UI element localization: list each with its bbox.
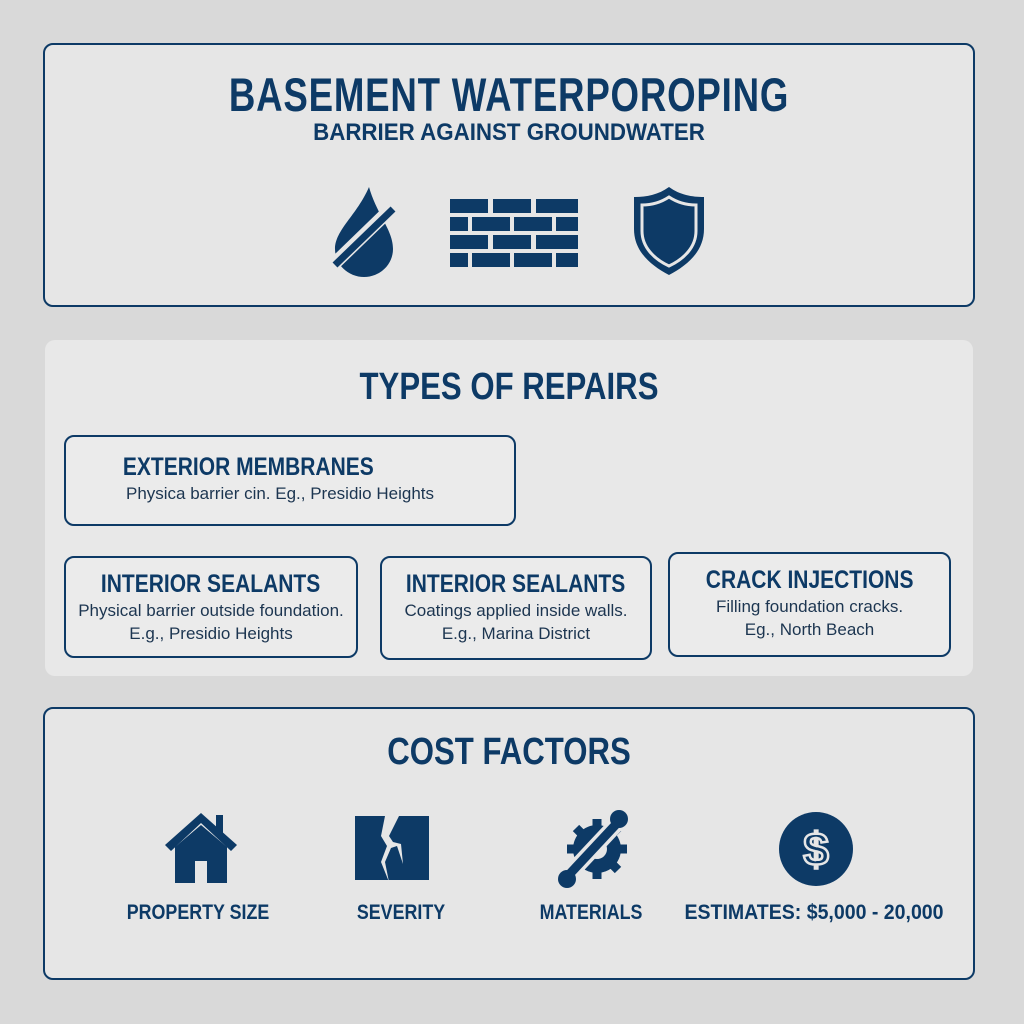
box: interior sealants 1 [64,556,358,658]
icon: house [165,813,237,883]
icon: crossed drop [332,187,396,277]
box: interior sealants 1: E.g., Presidio Heights [129,624,293,643]
box: interior sealants 2: Coatings applied inside walls. [404,601,628,620]
box: interior sealants 2: INTERIOR SEALANTS [406,570,626,598]
icon: dollar coin [779,812,853,886]
icon: shield [634,187,704,275]
heading: COST FACTORS [387,731,631,773]
box: exterior membranes [64,435,516,526]
box: interior sealants 2: E.g., Marina District [442,624,590,643]
box: interior sealants 1: INTERIOR SEALANTS [101,570,321,598]
subtitle: BARRIER AGAINST GROUNDWATER [313,119,705,146]
box: crack injections: Eg., North Beach [745,620,874,639]
icon: dollar coin: $ [803,823,829,875]
icon: brick wall [450,199,578,267]
label: property size: PROPERTY SIZE [127,901,269,924]
panel: types of repairs [45,340,973,676]
title: BASEMENT WATERPOROPING [229,68,789,121]
panel: header [43,43,975,307]
label: estimates: ESTIMATES: $5,000 - 20,000 [684,901,944,924]
panel: cost factors [43,707,975,980]
icon: cracked wall [355,816,429,880]
box: exterior membranes: Physica barrier cin. Eg., Presidio Heights [126,484,434,503]
box: crack injections: CRACK INJECTIONS [706,566,913,594]
box: crack injections: Filling foundation cracks. [716,597,903,616]
label: severity: SEVERITY [357,901,445,924]
heading: TYPES OF REPAIRS [360,366,658,408]
box: interior sealants 2 [380,556,652,660]
box: exterior membranes: EXTERIOR MEMBRANES [123,453,373,481]
label: materials: MATERIALS [540,901,642,924]
box: interior sealants 1: Physical barrier outside foundation. [78,601,344,620]
icon: gear wrench [558,810,628,888]
box: crack injections [668,552,951,657]
